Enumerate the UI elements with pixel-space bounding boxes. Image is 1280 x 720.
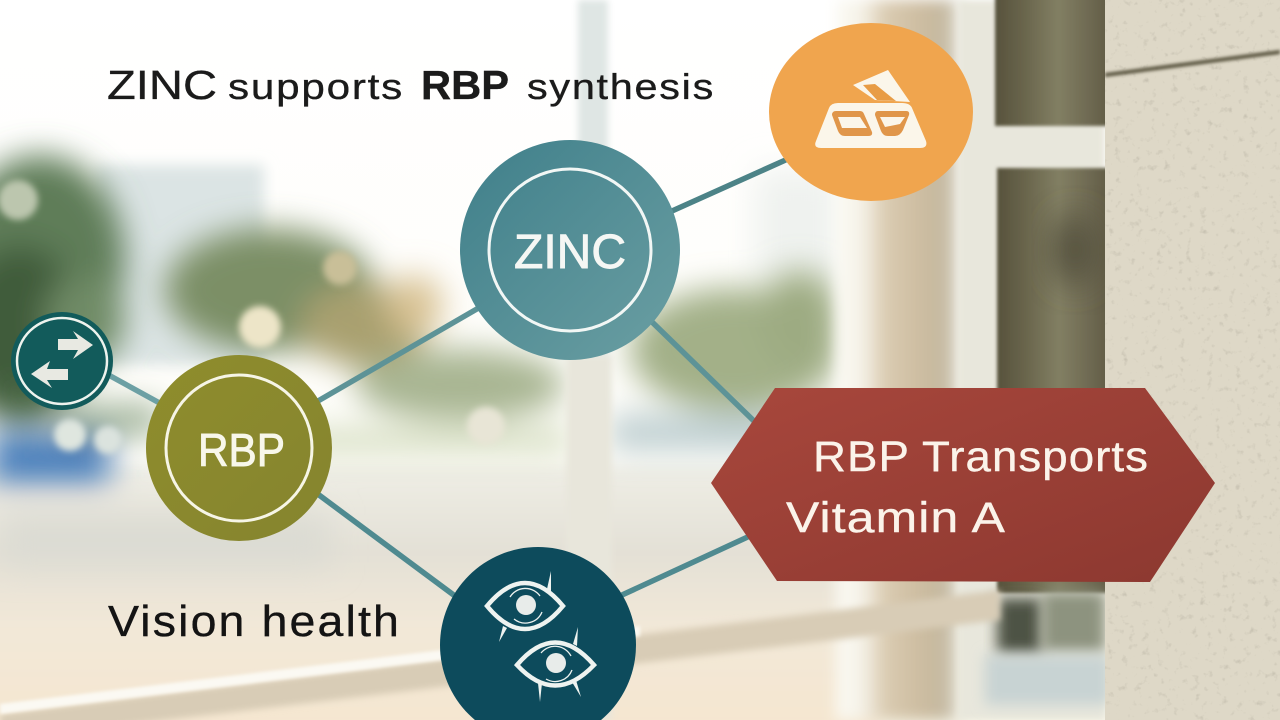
callout: RBP Transports Vitamin A [711, 388, 1215, 582]
title: ZINC supports RBP synthesis: synthesis [527, 66, 715, 107]
icon: left arrow [31, 361, 68, 388]
callout: RBP Transports Vitamin A: RBP Transports [813, 433, 1149, 481]
icon: right arrow [58, 331, 93, 359]
curtains [836, 0, 960, 720]
title: ZINC supports RBP synthesis: supports [228, 66, 404, 107]
connector lines [105, 158, 790, 596]
node: small arrows circle [11, 312, 113, 410]
node: vision circle with eyes [440, 547, 636, 720]
title: ZINC supports RBP synthesis [107, 62, 715, 108]
node: RBP circle: RBP [198, 424, 285, 476]
icon: upper eye [487, 571, 563, 642]
title: ZINC supports RBP synthesis: ZINC [107, 62, 217, 108]
node: ZINC circle: ZINC [514, 226, 626, 279]
node: ZINC circle [460, 140, 680, 360]
icon: lower eye [517, 627, 594, 702]
window frame [958, 0, 1105, 720]
stone wall [1105, 0, 1280, 720]
callout: RBP Transports Vitamin A: Vitamin A [786, 494, 1006, 542]
label: Vision health: Vision health [108, 597, 401, 646]
window mullion [578, 0, 608, 360]
node: RBP circle [146, 355, 332, 541]
title: ZINC supports RBP synthesis: RBP [421, 62, 509, 108]
node: orange circle with food tray icon [769, 23, 973, 201]
icon: tray [815, 70, 926, 148]
railing [0, 590, 1000, 720]
